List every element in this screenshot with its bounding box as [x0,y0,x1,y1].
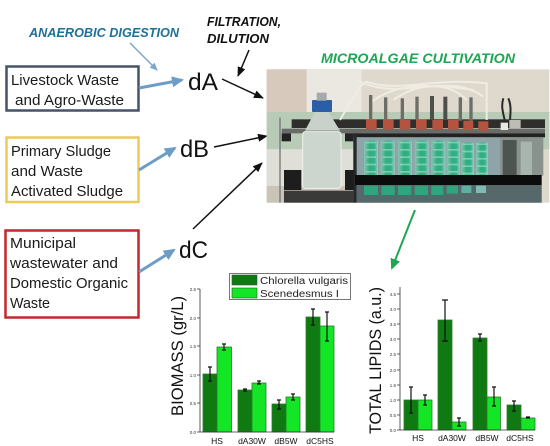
lipid x labels: dC5HS [506,433,534,443]
lipid tick labels: 0.5 [390,413,396,418]
arrow: municipal to dC [139,250,174,272]
biomass tick labels [190,287,196,435]
lipid tick labels: 2.5 [390,352,396,357]
lipid tick labels: 4.0 [390,307,396,312]
chart: total lipids [367,287,535,443]
heading: filtration, dilution [207,15,281,46]
base unit [284,170,301,190]
arrow: anaerobic digestion [130,43,157,70]
panel: primary sludge: Primary Sludge [11,144,111,160]
stoppers [366,119,377,129]
lipid tick labels: 2.0 [390,368,396,373]
arrow: sludge to dB [139,148,175,170]
panel: livestock waste [6,66,138,110]
biomass x labels: dB5W [274,436,298,446]
arrow: dA to photo [222,79,263,98]
biomass bars [203,317,334,432]
biomass axes [197,289,334,432]
biomass x labels: HS [211,436,223,446]
panel: livestock waste: Livestock Waste [11,73,119,89]
biomass tick labels: 0.0 [190,430,196,435]
label: dB: dB [180,136,209,163]
panel: municipal wastewater: Waste [10,296,50,312]
lipid tick labels: 1.0 [390,398,396,403]
lipid tick labels: 1.5 [390,383,396,388]
chart: biomass [168,274,350,446]
panel: municipal wastewater: wastewater and [9,256,118,272]
heading: anaerobic digestion: ANAEROBIC DIGESTION [28,26,180,40]
biomass x labels: dA30W [238,436,266,446]
lipid tick labels [390,292,396,433]
lipid axes [397,287,535,430]
legend: Scenedesmus I [260,289,339,300]
heading: microalgae cultivation: MICROALGAE CULTIVATION [321,50,516,66]
arrow: livestock to dA [139,80,182,88]
panel: municipal wastewater: Domestic Organic [10,276,128,292]
panel: livestock waste: and Agro-Waste [15,93,124,109]
heading: filtration, dilution: DILUTION [207,32,270,46]
arrow: dB to photo [214,136,267,147]
lipid x labels: dB5W [475,433,499,443]
panel: municipal wastewater: Municipal [10,236,76,252]
frame [279,118,281,203]
lipid tick labels: 0.0 [390,428,396,433]
biomass tick labels: 1.5 [190,344,196,349]
lipid tick labels: 4.5 [390,292,396,297]
legend [230,274,350,300]
panel: primary sludge: and Waste [11,164,83,180]
condenser [503,140,517,175]
lipid bars [404,320,535,430]
panel: municipal wastewater [6,230,138,318]
lipid tick labels: 3.0 [390,337,396,342]
label: dC: dC [179,237,208,264]
arrow: photo to lipids [392,210,415,268]
legend: Chlorella vulgaris [260,276,348,287]
lipid x labels [412,433,534,443]
columns [364,141,378,176]
biomass error bars [208,309,329,409]
biomass tick labels: 1.0 [190,373,196,378]
photo: photobioreactor [267,69,549,203]
panel: primary sludge: Activated Sludge [11,184,123,200]
y axis title: biomass: BIOMASS (gr/L) [168,296,187,416]
lipid x labels: HS [412,433,424,443]
biomass tick labels: 2.0 [190,316,196,321]
bottle [303,132,341,188]
tubing [340,80,487,120]
lipid x labels: dA30W [438,433,466,443]
label: dA: dA [188,69,218,96]
biomass x labels: dC5HS [306,436,334,446]
arrow: filtration to dA [238,50,249,76]
y axis title: total lipids: TOTAL LIPIDS (a.u.) [367,287,385,434]
biomass tick labels: 0.5 [190,401,196,406]
biomass tick labels: 2.5 [190,287,196,292]
column highlights [371,142,482,175]
arrow: dC to photo [193,163,262,229]
panel: primary sludge [6,138,138,202]
biomass x labels [211,436,334,446]
heading: filtration, dilution: FILTRATION, [207,15,281,29]
lipid tick labels: 3.5 [390,322,396,327]
lipid error bars [409,300,530,426]
